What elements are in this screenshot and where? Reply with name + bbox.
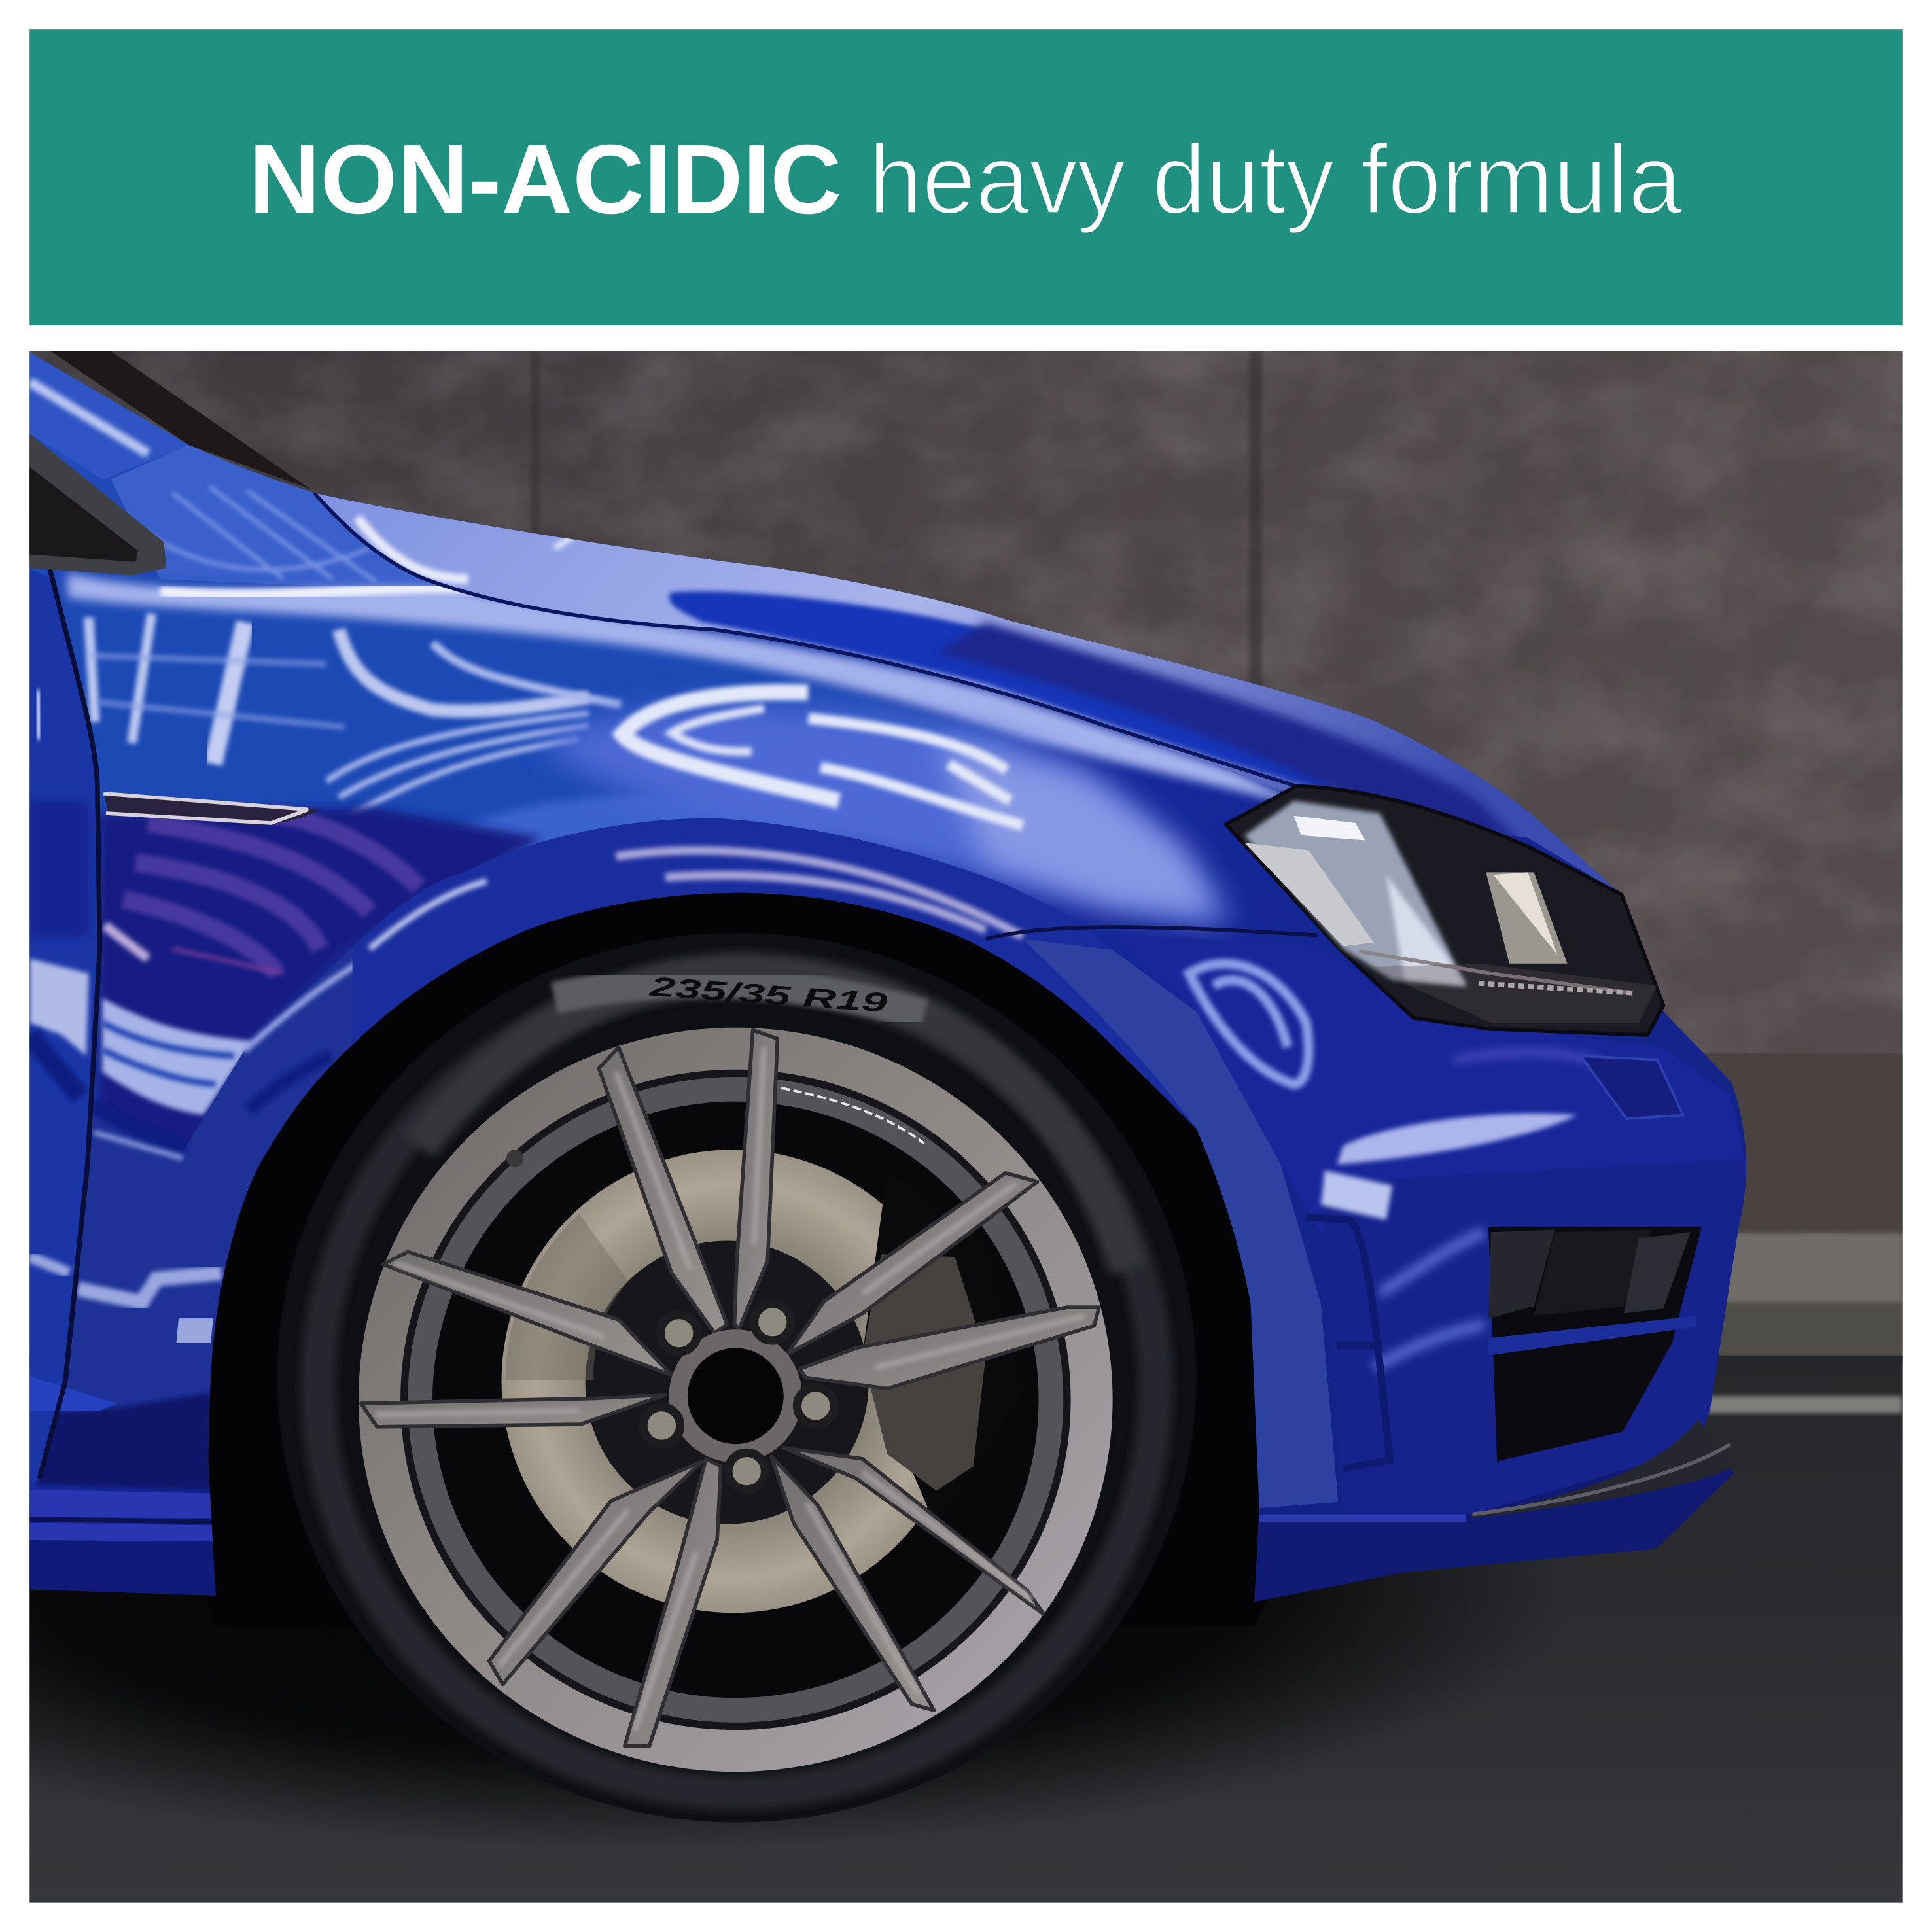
hub centre bbox=[669, 1329, 802, 1462]
quarter window bbox=[29, 434, 166, 575]
A pillar bbox=[29, 353, 188, 480]
bonnet bbox=[314, 493, 1621, 894]
rim inner barrel bbox=[404, 1073, 1067, 1726]
road surface bbox=[29, 1356, 1903, 1903]
lower fender field bbox=[61, 877, 526, 1462]
front flare bbox=[1023, 939, 1338, 1508]
car body bbox=[29, 353, 1749, 1822]
fender dome highlight bbox=[542, 705, 1232, 924]
photo: blue car front wheel bbox=[29, 351, 1903, 1903]
door panel bbox=[29, 569, 100, 1484]
dark base of fender bbox=[37, 1392, 212, 1491]
front splitter bbox=[1259, 1420, 1735, 1518]
fog light intake bbox=[1488, 1227, 1702, 1462]
lug nuts bbox=[643, 1304, 834, 1490]
header banner bbox=[29, 29, 1903, 325]
brake caliper bbox=[862, 1254, 986, 1491]
tyre bbox=[277, 933, 1197, 1822]
spokes bbox=[361, 1030, 1099, 1746]
side vent trim bbox=[1306, 1218, 1390, 1469]
main fender field bbox=[61, 579, 1023, 986]
wheel arch interior bbox=[208, 892, 1259, 1625]
brake disc bbox=[501, 1150, 1023, 1613]
heading: non-acidic: NON-ACIDIC bbox=[249, 124, 841, 234]
kerb bbox=[1727, 1231, 1903, 1360]
lip panel bbox=[1254, 1449, 1735, 1602]
dashed rim marking bbox=[781, 1088, 924, 1144]
quarter panel bbox=[111, 445, 456, 591]
rim well bbox=[432, 1102, 1039, 1698]
spoke highlights bbox=[376, 1047, 1084, 1731]
sill bbox=[29, 1490, 212, 1518]
heading: heavy duty formula: heavy duty formula bbox=[869, 124, 1682, 234]
tyre size marking: 235/35 R19 bbox=[648, 971, 888, 1018]
fender stripes bbox=[89, 614, 152, 743]
headlight bbox=[1226, 786, 1663, 1035]
lower fender dark purple zone bbox=[99, 807, 542, 1186]
rim outer ring bbox=[359, 1028, 1113, 1772]
fender white band bbox=[102, 998, 253, 1115]
wheel bbox=[277, 933, 1197, 1822]
front fender corner bbox=[1113, 934, 1748, 1232]
side marker trim bbox=[103, 792, 321, 825]
parking sensor cover bbox=[1581, 1056, 1683, 1119]
bonnet seam bbox=[314, 493, 1343, 801]
door seam bbox=[39, 567, 100, 1479]
body reflections bbox=[29, 353, 1749, 1602]
concrete wall bbox=[29, 351, 1903, 1361]
bumper lower panel bbox=[1321, 1158, 1749, 1515]
pale crease band bbox=[68, 573, 1306, 807]
windshield bbox=[50, 351, 311, 489]
valve stem bbox=[506, 1150, 523, 1167]
fender seam bbox=[986, 927, 1317, 939]
arch lip bbox=[353, 818, 1338, 1508]
